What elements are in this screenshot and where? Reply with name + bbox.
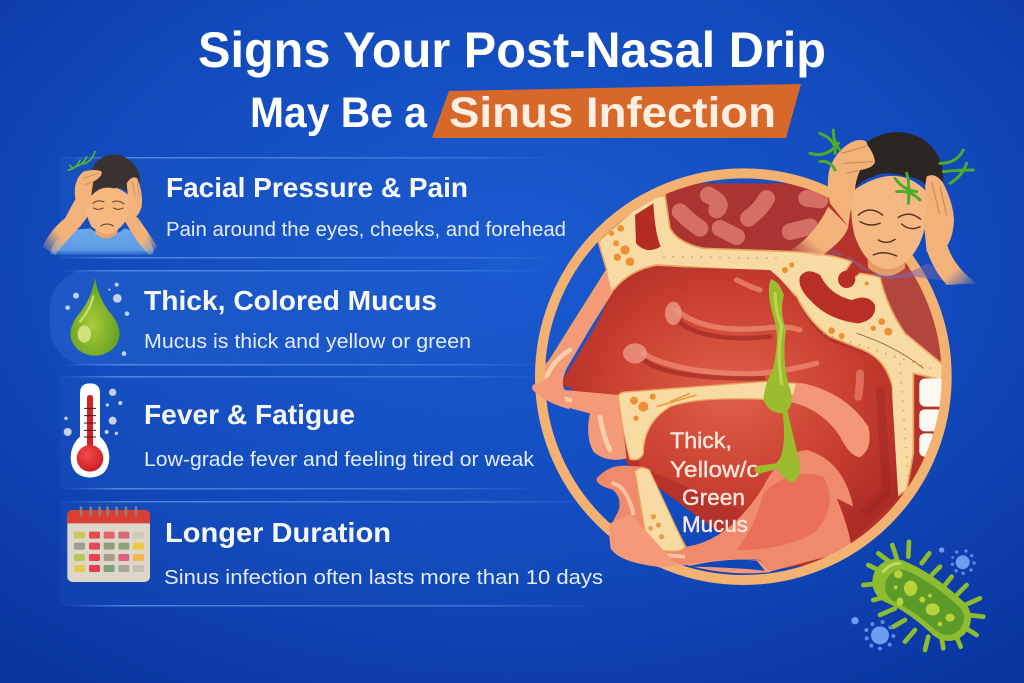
nasal cavity	[563, 267, 898, 543]
description: facial pressure: Pain around the eyes, cheeks, and forehead	[166, 219, 566, 241]
panel: thick colored mucus	[50, 270, 550, 366]
label: thick yellow green mucus: Yellow/o	[670, 457, 760, 482]
heading: facial pressure: Facial Pressure & Pain	[166, 172, 468, 203]
palate	[618, 382, 870, 460]
nose skin	[545, 243, 627, 460]
shirt fade	[790, 244, 977, 285]
lips, jaw and tongue	[597, 450, 853, 572]
body	[895, 582, 948, 618]
description: duration: Sinus infection often lasts more than 10 days	[164, 567, 603, 589]
title line two lead: May Be a	[250, 89, 428, 137]
icon: calendar	[67, 508, 150, 582]
viruses	[851, 547, 976, 651]
icon: green mucus drop	[65, 277, 129, 356]
spikes	[863, 542, 983, 650]
title line one: Signs Your Post-Nasal Drip	[198, 22, 826, 78]
label: thick yellow green mucus: Mucus	[682, 512, 748, 537]
green wisps	[810, 130, 973, 203]
heading: thick colored mucus: Thick, Colored Mucus	[144, 285, 437, 316]
description: fever: Low-grade fever and feeling tired or weak	[144, 449, 535, 471]
panel: longer duration	[60, 501, 603, 606]
hair	[853, 132, 943, 192]
icon: small headache person	[43, 152, 157, 255]
heading: fever and fatigue: Fever & Fatigue	[144, 399, 355, 430]
title	[198, 22, 826, 138]
label: thick yellow green mucus: Green	[682, 485, 745, 510]
skull and sinus bone	[550, 195, 943, 500]
icon: headache boy over the circle	[790, 130, 977, 285]
facial features	[858, 210, 921, 256]
neck	[867, 250, 907, 276]
hand right	[923, 175, 954, 252]
orange banner: Sinus Infection	[449, 89, 776, 137]
hand left	[828, 140, 875, 227]
panel: fever and fatigue	[60, 376, 540, 490]
panel: facial pressure and pain	[43, 152, 566, 258]
tissue base	[570, 177, 950, 570]
label: thick yellow green mucus: Thick,	[670, 428, 732, 453]
label: thick yellow green mucus	[670, 428, 760, 537]
mucus strand	[755, 279, 801, 482]
arms	[790, 207, 848, 257]
heading: longer duration: Longer Duration	[165, 517, 391, 548]
circular ring	[540, 173, 947, 580]
sphenoid sinus	[799, 271, 875, 323]
brain folds	[663, 183, 843, 252]
pharynx wall	[881, 268, 941, 362]
outer lips over ring	[532, 373, 771, 573]
icon: thermometer	[64, 383, 122, 478]
sinus anatomy cross-section	[532, 173, 950, 580]
icon: green bacteria with viruses	[851, 542, 983, 651]
description: mucus: Mucus is thick and yellow or green	[144, 331, 471, 353]
teeth	[919, 378, 942, 457]
face	[851, 176, 927, 269]
